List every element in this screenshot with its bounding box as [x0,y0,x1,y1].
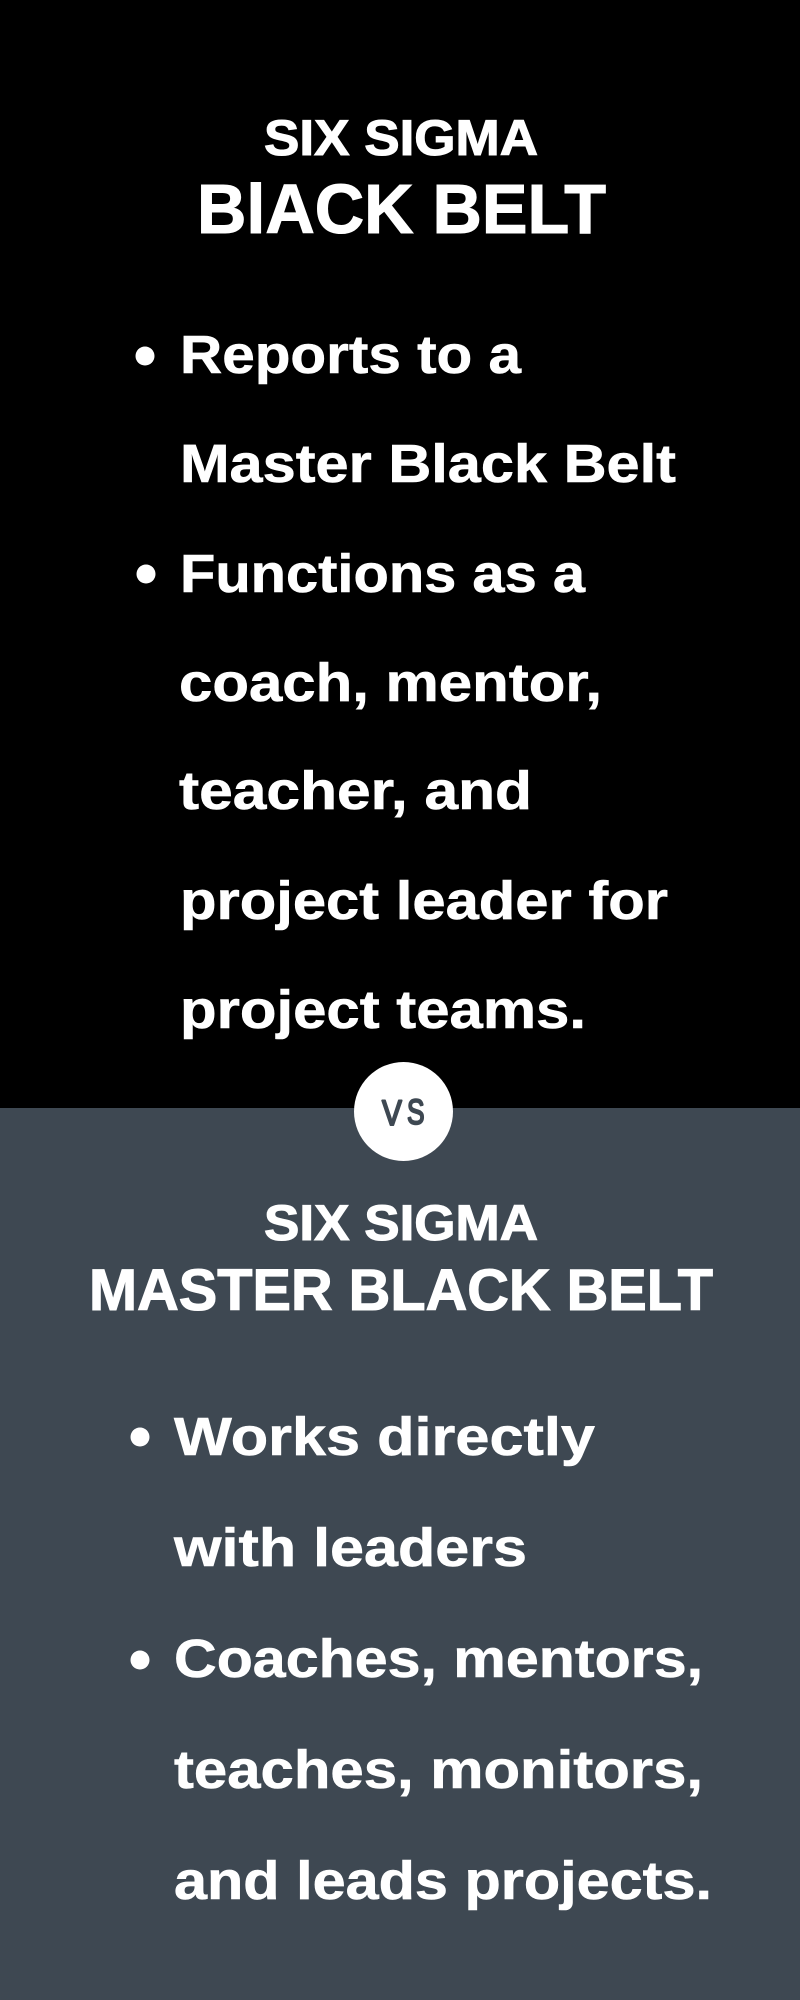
bullet item: coaches: Coaches, mentors, [174,1629,703,1689]
heading: six sigma master black belt [89,1195,713,1323]
bullet item: coaches: teaches, monitors, [174,1740,703,1800]
bullet item: works directly: with leaders [173,1518,527,1578]
bullet item: functions: Functions as a [180,544,586,604]
heading: six sigma black belt [197,110,606,248]
bullet item: functions [136,544,668,1040]
text block: black belt bullet list [136,325,676,1040]
badge: vs circle: V [382,1094,402,1133]
bullet item: coaches [130,1629,712,1911]
bullet item: functions: project leader for [180,871,668,931]
heading: six sigma black belt: BlACK BELT [197,170,606,248]
panel: master black belt background [0,1108,800,2000]
badge: vs circle [354,1062,453,1161]
bullet item: works directly: Works directly [174,1407,595,1467]
bullet item: reports to: Master Black Belt [180,434,676,494]
bullet item: reports to [136,325,676,494]
bullet item: works directly [130,1407,595,1578]
bullet item: functions: project teams. [180,980,586,1040]
bullet item: functions: coach, mentor, [179,653,602,713]
heading: six sigma black belt: SIX SIGMA [264,110,538,166]
badge: vs circle: S [407,1092,425,1132]
heading: six sigma master black belt: MASTER BLACK BELT [89,1258,713,1323]
heading: six sigma master black belt: SIX SIGMA [264,1195,538,1251]
text block: master black belt bullet list [130,1407,712,1911]
panel: black belt background [0,0,800,1108]
bullet item: functions: teacher, and [179,761,532,821]
bullet item: reports to: Reports to a [180,325,522,385]
bullet item: coaches: and leads projects. [174,1851,712,1911]
